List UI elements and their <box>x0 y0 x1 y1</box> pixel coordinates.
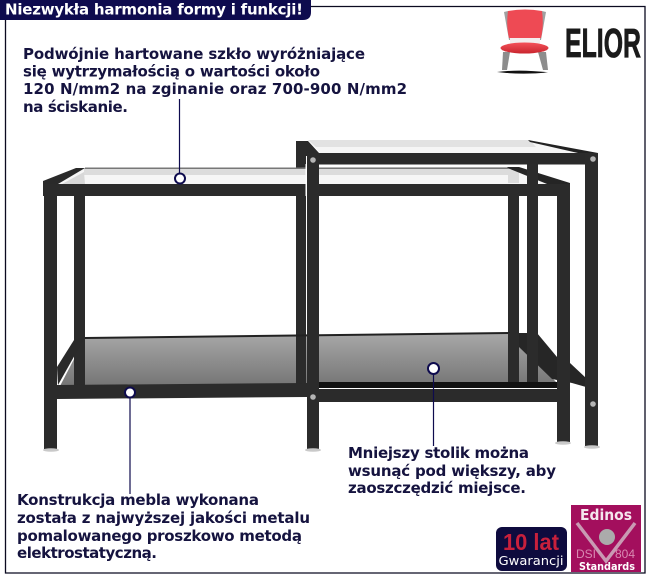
text: smaller table: wsunąć pod większy, aby <box>348 462 556 480</box>
text: frame construction <box>17 491 310 562</box>
shelf frame <box>57 164 586 402</box>
text: smaller table <box>348 444 556 497</box>
badge: Edinos standards: Standards <box>579 560 635 573</box>
text: smaller table: Mniejszy stolik można <box>348 444 529 462</box>
tall table glass top <box>296 140 598 164</box>
callout line: frame <box>125 388 135 494</box>
large table glass top <box>43 167 570 196</box>
text: glass strength: się wytrzymałością o wartości około <box>23 62 320 80</box>
callout line: smaller table <box>428 363 439 446</box>
badge: 10 lat warranty: 10 lat <box>503 529 559 555</box>
lower black glass shelf <box>60 333 557 386</box>
text: smaller table: zaoszczędzić miejsce. <box>348 479 526 497</box>
nesting tables illustration <box>43 140 600 452</box>
feet <box>43 441 600 452</box>
logo: Elior chair <box>497 10 641 74</box>
text: glass strength <box>23 45 407 116</box>
text: frame construction: została z najwyższej jakości metalu <box>17 509 310 527</box>
text: frame construction: Konstrukcja mebla wykonana <box>17 491 259 509</box>
header banner: Niezwykła harmonia formy i funkcji! <box>5 0 303 18</box>
callout line: glass <box>175 99 185 184</box>
text: glass strength: 120 N/mm2 na zginanie oraz 700-900 N/mm2 <box>23 80 407 98</box>
badge: Edinos standards: DSI <box>576 547 596 561</box>
text: glass strength: Podwójnie hartowane szkło wyróżniające <box>23 45 365 63</box>
text: frame construction: elektrostatyczną. <box>17 544 157 562</box>
front legs <box>44 153 598 449</box>
badge: Edinos standards: Edinos <box>580 506 632 524</box>
screws <box>310 156 596 407</box>
text: glass strength: na ściskanie. <box>23 98 128 116</box>
text: frame construction: pomalowanego proszkowo metodą <box>17 527 302 545</box>
badge: Edinos standards: 804 <box>615 547 635 561</box>
badge: 10 lat warranty: Gwarancji <box>498 554 564 568</box>
badge: Edinos standards <box>571 505 641 573</box>
tall table back legs <box>296 150 538 390</box>
badge: 10 lat warranty <box>496 527 567 571</box>
